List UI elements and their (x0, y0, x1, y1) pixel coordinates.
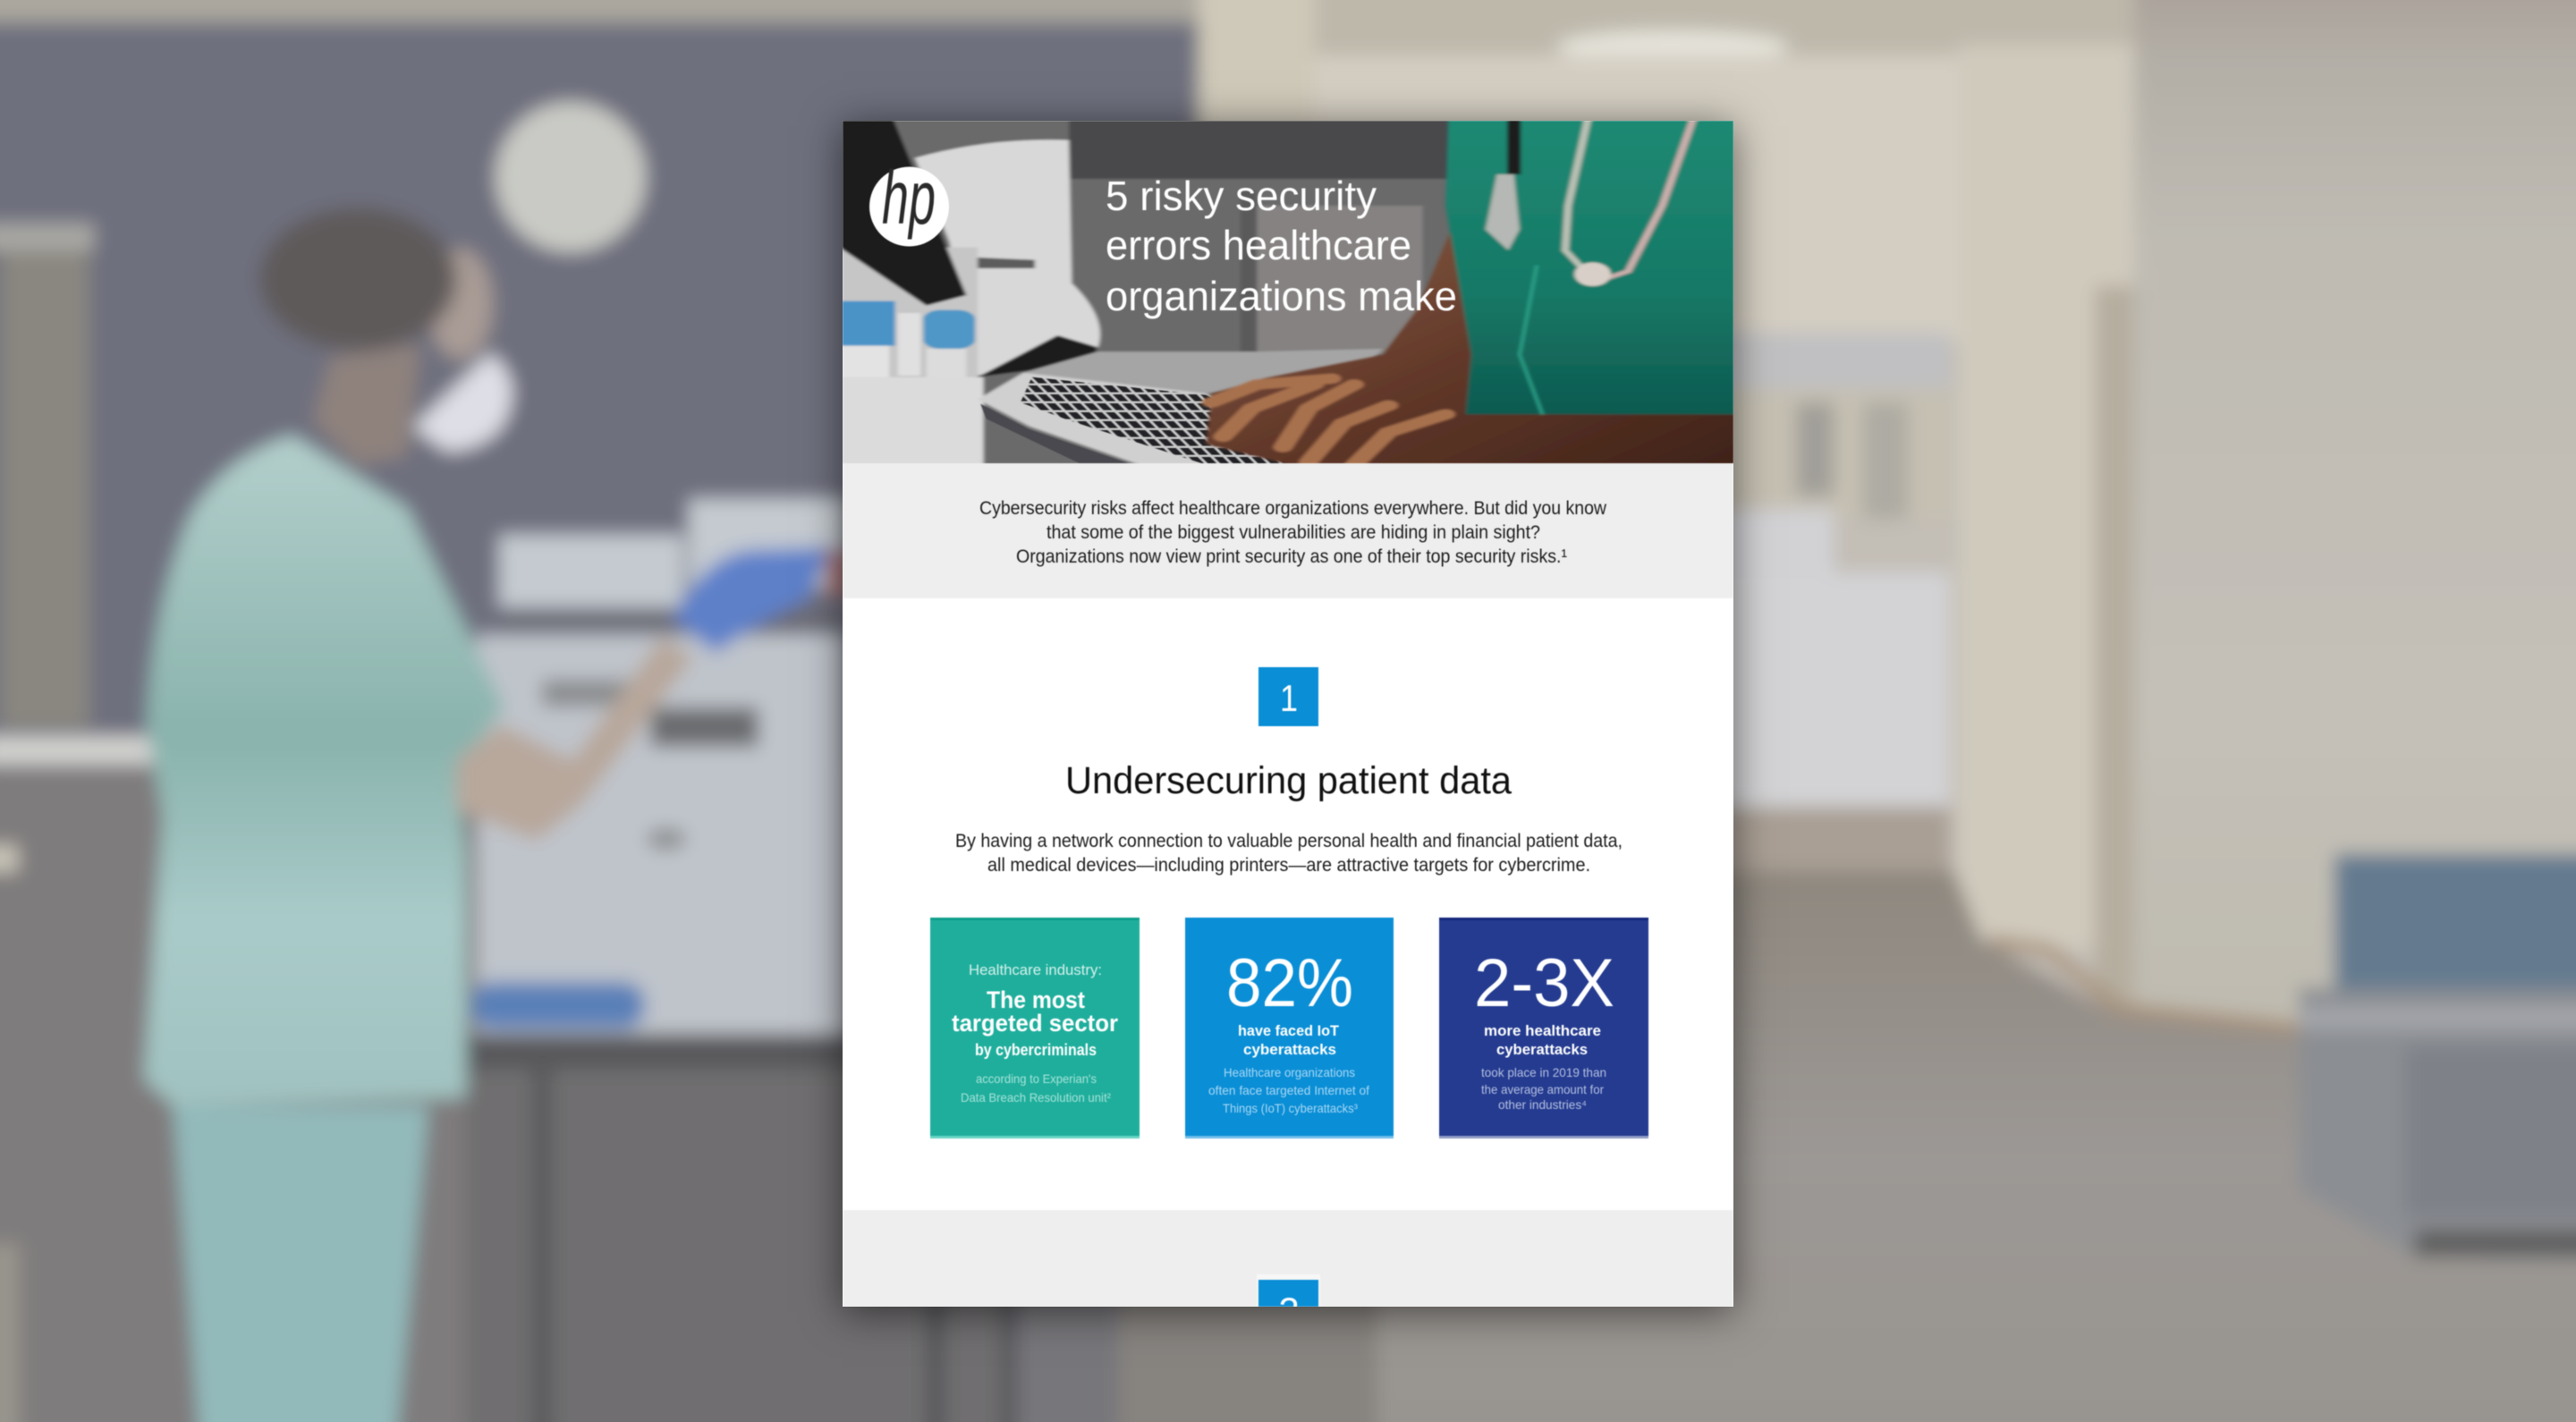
card: 82%: have faced IoT (1238, 1022, 1340, 1039)
card: 2-3X: 2-3X (1474, 945, 1614, 1021)
card: 82% (1185, 918, 1394, 1138)
panel: error 1 (843, 598, 1733, 1210)
description (955, 831, 1623, 876)
title (1106, 173, 1457, 319)
card: most targeted sector: Data Breach Resolution unit² (961, 1090, 1111, 1105)
panel: intro: Organizations now view print security as one of their top security risks.¹ (1016, 546, 1567, 567)
card: 82%: cyberattacks (1243, 1041, 1336, 1058)
hero photo: clinician typing on keyboard (835, 116, 1742, 468)
card: most targeted sector (930, 918, 1140, 1138)
title: 5 risky security (1106, 173, 1377, 219)
heading: Undersecuring patient data (1065, 759, 1512, 802)
card: 2-3X: cyberattacks (1496, 1041, 1588, 1058)
card: 82%: often face targeted Internet of (1208, 1083, 1369, 1097)
title: organizations make (1106, 273, 1457, 319)
number badge 2 (1257, 1274, 1320, 1332)
card: 2-3X (1439, 918, 1648, 1138)
panel: error 2 (cut off) (843, 1210, 1733, 1332)
card: 82%: 82% (1226, 945, 1353, 1021)
card: most targeted sector: The most (987, 986, 1085, 1013)
panel: intro: Cybersecurity risks affect healthcare organizations everywhere. But did you know (979, 498, 1607, 519)
card: 2-3X: the average amount for (1481, 1082, 1604, 1096)
panel: intro: that some of the biggest vulnerabilities are hiding in plain sight? (1046, 522, 1540, 543)
card: 2-3X: took place in 2019 than (1481, 1065, 1606, 1079)
document page preview (843, 121, 1733, 1307)
card: most targeted sector: according to Experian's (976, 1071, 1097, 1086)
number badge 1 (1258, 667, 1318, 726)
card: 2-3X: other industries⁴ (1498, 1097, 1587, 1112)
panel: intro (843, 463, 1733, 598)
title: errors healthcare (1106, 222, 1411, 268)
description: all medical devices—including printers—are attractive targets for cybercrime. (987, 855, 1590, 876)
number badge 1: 1 (1280, 677, 1298, 719)
card: 2-3X: more healthcare (1484, 1022, 1601, 1039)
HP logo: hp (882, 156, 936, 240)
card: most targeted sector: by cybercriminals (975, 1041, 1097, 1059)
card: most targeted sector: targeted sector (952, 1010, 1118, 1037)
card: 82%: Healthcare organizations (1224, 1065, 1355, 1079)
HP logo (869, 156, 949, 247)
description: By having a network connection to valuable personal health and financial patient data, (955, 831, 1623, 851)
card: 82%: Things (IoT) cyberattacks³ (1223, 1101, 1358, 1115)
card: most targeted sector: Healthcare industry: (969, 961, 1102, 978)
